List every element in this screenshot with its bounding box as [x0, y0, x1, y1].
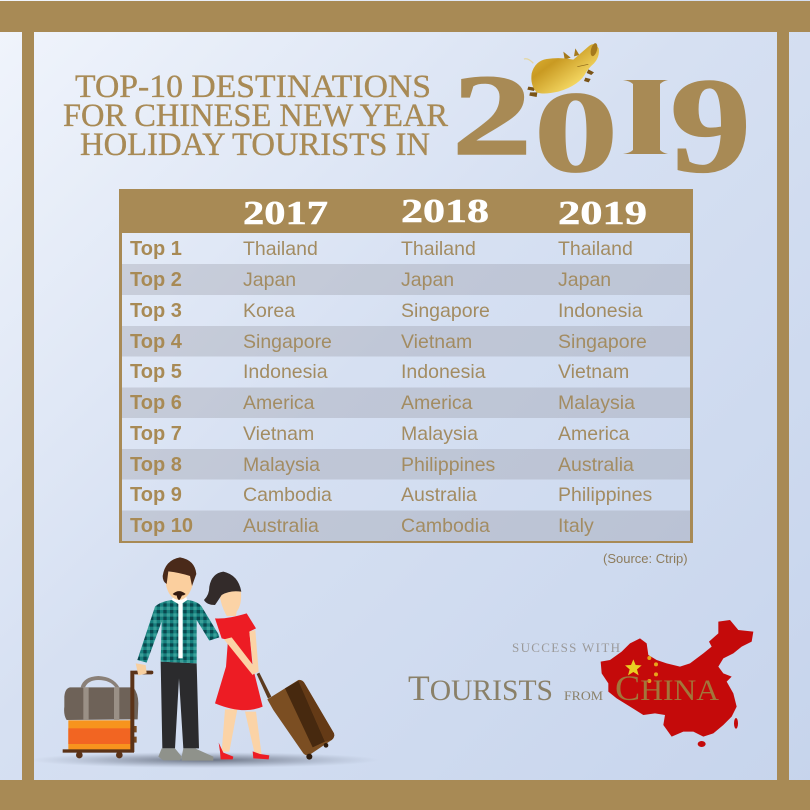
column 2018: Thailand [401, 238, 476, 260]
title: HOLIDAY TOURISTS IN [80, 127, 430, 163]
map silhouette [601, 620, 753, 737]
rank labels: Top 9 [130, 484, 182, 506]
rank labels: Top 4 [130, 331, 183, 353]
column 2019: Italy [558, 515, 594, 537]
column 2019: America [558, 423, 630, 445]
icon: golden pig [524, 42, 599, 97]
rank labels: Top 8 [130, 454, 182, 476]
column 2017: Singapore [243, 331, 332, 353]
title: FOR CHINESE NEW YEAR [63, 98, 448, 134]
rank labels: Top 10 [130, 515, 193, 537]
rank labels: Top 1 [130, 238, 182, 260]
column 2019: Thailand [558, 238, 633, 260]
rank labels: Top 2 [130, 269, 182, 291]
big year 2019: 1 [631, 59, 661, 176]
rank labels: Top 3 [130, 300, 182, 322]
column 2019: Japan [558, 269, 611, 291]
big year 2019: 0 [534, 69, 618, 197]
rank labels: Top 7 [130, 423, 182, 445]
rank labels [130, 238, 193, 537]
flag stars [625, 656, 658, 683]
illustration: travelling couple with luggage [30, 557, 380, 768]
tagline: success with tourists from China [408, 640, 719, 708]
column 2018: Vietnam [401, 331, 472, 353]
column 2018: Cambodia [401, 515, 490, 537]
ground shadow [30, 752, 380, 768]
source note: (Source: Ctrip) [603, 551, 688, 566]
title [63, 69, 448, 163]
big year 2019: 2 [452, 52, 532, 180]
column 2018: Australia [401, 484, 477, 506]
table frame and header band [119, 189, 693, 543]
column 2019: Australia [558, 454, 634, 476]
big year 2019: 9 [670, 51, 751, 201]
table header years: 2017 [243, 195, 328, 232]
rank labels: Top 5 [130, 361, 182, 383]
column 2017: Cambodia [243, 484, 332, 506]
tagline: success with tourists from China: SUCCESS WITH [512, 640, 620, 655]
column 2019: Singapore [558, 331, 647, 353]
column 2019: Malaysia [558, 392, 635, 414]
luggage trolley [63, 671, 153, 758]
rank labels: Top 6 [130, 392, 182, 414]
table [119, 189, 693, 543]
icon: China map with flag stars [601, 620, 753, 747]
column 2018: Philippines [401, 454, 496, 476]
column 2019: Philippines [558, 484, 653, 506]
column 2017: Korea [243, 300, 295, 322]
column 2019: Indonesia [558, 300, 643, 322]
column 2017: America [243, 392, 315, 414]
tagline: success with tourists from China: FROM [564, 688, 603, 703]
column 2018: Indonesia [401, 361, 486, 383]
column 2017: Malaysia [243, 454, 320, 476]
column 2017 [243, 238, 332, 537]
column 2018: America [401, 392, 473, 414]
table header years [243, 193, 647, 232]
column 2018: Malaysia [401, 423, 478, 445]
man [136, 557, 219, 761]
column 2018: Singapore [401, 300, 490, 322]
column 2017: Japan [243, 269, 296, 291]
table stripes [122, 264, 690, 541]
title: TOP-10 DESTINATIONS [75, 69, 431, 105]
column 2017: Indonesia [243, 361, 328, 383]
tagline: success with tourists from China: TOURISTS [408, 668, 553, 708]
column 2017: Vietnam [243, 423, 314, 445]
column 2017: Australia [243, 515, 319, 537]
column 2017: Thailand [243, 238, 318, 260]
rolling suitcase [257, 673, 334, 760]
column 2019 [558, 238, 653, 537]
table header years: 2019 [558, 195, 647, 232]
tagline: success with tourists from China: CHINA [615, 668, 719, 708]
table header years: 2018 [401, 193, 489, 230]
column 2019: Vietnam [558, 361, 629, 383]
column 2018 [401, 238, 496, 537]
woman [204, 572, 269, 759]
column 2018: Japan [401, 269, 454, 291]
big year 2019 [452, 51, 751, 201]
